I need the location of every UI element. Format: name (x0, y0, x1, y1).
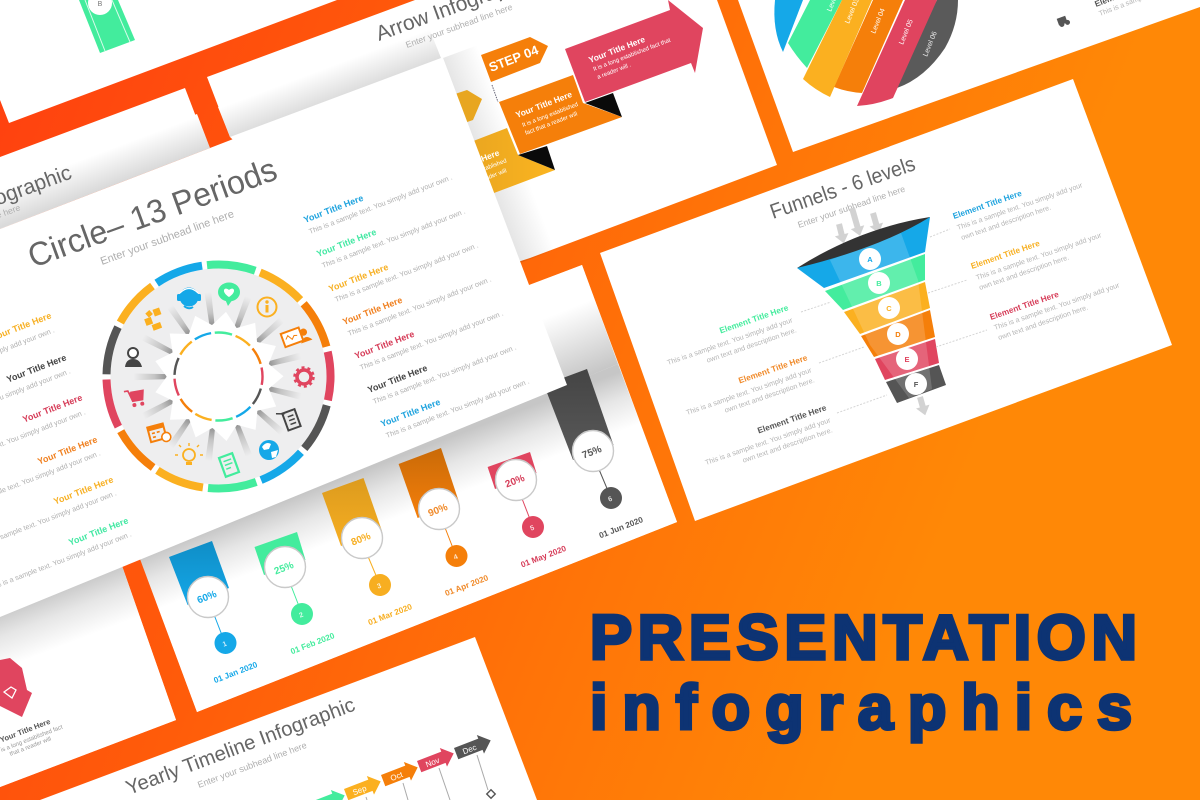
step 4: 90%: 01 Apr 2020 (444, 573, 490, 598)
element text: blue: Element Title Here (951, 188, 1023, 221)
dotted connector (492, 85, 498, 102)
arrow: Dec (453, 731, 494, 763)
right list: item 1: Your Title Here (302, 193, 365, 225)
subhead: Enter your subhead line here (99, 208, 236, 268)
panel: circle 13 periods slide (0, 58, 567, 617)
outer ring segments (60, 218, 377, 535)
red step arrow: It is a long established fact that (593, 38, 672, 73)
element text: orange: This is a sample text. You simply add your (685, 366, 813, 417)
inner ring segments (156, 314, 281, 439)
element text: orange: Element Title Here (737, 352, 809, 385)
step 1: 60%: 1 (222, 641, 228, 649)
step 3: 80% (322, 478, 414, 627)
step 04 tag (481, 37, 548, 82)
caption: Your Title Here (0, 717, 52, 744)
right list: item 6: Your Title Here (366, 363, 429, 395)
arrow: Oct: Oct (389, 770, 405, 783)
element text: dark: own text and description here. (742, 426, 834, 465)
funnel stack: C (886, 304, 892, 313)
element text: dark: Element Title Here (756, 402, 828, 435)
step 4: 90%: 4 (453, 554, 459, 562)
icon: info circle (258, 298, 276, 316)
step 3: 80%: 80% (350, 531, 373, 548)
headline: PRESENTATION infographics: infographics (590, 673, 1132, 743)
icon: document (276, 407, 301, 433)
left list: item 6: Your Title Here (67, 516, 130, 548)
right list: item 7: This is a sample text. You simply add your own . (384, 377, 531, 440)
subhead: Enter your subhead line here (404, 2, 514, 50)
left list: item 2: Your Title Here (5, 353, 68, 385)
headline: PRESENTATION infographics (590, 603, 1137, 743)
step 5: 20%: 20% (504, 473, 527, 490)
element text: green: Element Title Here (718, 302, 790, 335)
step 1: 60%: 01 Jan 2020 (213, 660, 259, 685)
arrow: Sep: Sep (351, 784, 368, 797)
heading: Yearly Timeline Infographic (123, 694, 358, 800)
element text: dark: This is a sample text. You simply add your (704, 416, 832, 467)
red arrow with diamond icon (0, 658, 32, 717)
element text: orange: own text and description here. (724, 376, 816, 415)
right list: item 4: This is a sample text. You simply add your own . (346, 275, 493, 338)
yellow step block (441, 128, 555, 194)
funnel circle B (868, 272, 890, 294)
subhead: Enter your subhead line here (796, 184, 907, 230)
right list: item 2: This is a sample text. You simply add your own . (320, 207, 467, 270)
green ribbon with letter B: B (98, 1, 103, 8)
step 4: 90%: 90% (427, 502, 450, 519)
panel: percentage timeline slide (100, 265, 677, 712)
step 2: 25%: 2 (298, 612, 305, 620)
step 5: 20%: 5 (529, 525, 536, 533)
right list: item 5: Your Title Here (353, 329, 416, 361)
icon: note with pen (219, 453, 239, 477)
panel: yearly timeline slide (40, 637, 537, 800)
red step arrow: a reader will . (597, 62, 632, 81)
funnel circle F (905, 373, 927, 395)
icon: dark gears (1057, 15, 1071, 28)
arrow: Dec: Dec (461, 743, 478, 756)
heading: Funnels - 6 levels (767, 152, 918, 224)
step 6: 75% (544, 369, 645, 540)
step 04 tag: STEP 04 (487, 42, 541, 75)
arrow: Nov: Nov (424, 756, 441, 769)
milestone diamond (487, 790, 495, 798)
left list: item 3: Your Title Here (21, 393, 84, 425)
headline: PRESENTATION infographics: PRESENTATION (590, 603, 1137, 673)
right list: item 1: This is a sample text. You simply add your own . (307, 173, 454, 236)
step 6: 75%: 6 (607, 496, 614, 504)
pie of levels (774, 0, 958, 106)
red step arrow (565, 0, 703, 102)
white starburst (152, 310, 284, 443)
left list: item 4: Your Title Here (36, 435, 99, 467)
element text: yellow: This is a sample text. You simply add your (975, 231, 1103, 282)
element text: green: own text and description here. (706, 326, 798, 365)
panel: arrow infographic slide (207, 0, 777, 300)
arrow: Nov (416, 744, 457, 776)
panel: infographic slide behind circle (0, 88, 210, 251)
orange step block: Your Title Here (514, 89, 574, 120)
right list: item 5: This is a sample text. You simply add your own . (358, 309, 505, 372)
left list: item 5: Your Title Here (52, 475, 115, 507)
element text: yellow: Element Title Here (969, 238, 1041, 271)
icon: person (125, 348, 142, 367)
funnel stack: E (904, 355, 910, 364)
panel: funnel slide (600, 79, 1172, 521)
element text: red: Element Title Here (988, 289, 1060, 322)
step 2: 25%: 01 Feb 2020 (289, 631, 336, 656)
funnel stack: A (867, 255, 873, 264)
icon: headset (177, 288, 201, 308)
funnel stack (797, 217, 946, 403)
yellow step block: fact that a reader will (454, 168, 508, 194)
yellow step block: Your Title Here (441, 147, 501, 178)
right list: item 2: Your Title Here (315, 227, 378, 259)
funnel circle E (896, 348, 918, 370)
icon: heart speech bubble (218, 282, 240, 306)
orange step block (499, 75, 622, 154)
element text: blue: This is a sample text. You simply add your (956, 181, 1084, 232)
icon: presentation board (281, 324, 312, 349)
step 6: 75%: 75% (581, 444, 604, 461)
icon: shopping cart (124, 388, 146, 408)
subhead: Enter your subhead line here (196, 740, 308, 790)
green ribbon with letter B (79, 0, 135, 53)
arrow: Oct (380, 758, 421, 790)
right list: item 7: Your Title Here (379, 397, 442, 429)
funnel circle C (878, 297, 900, 319)
icon: gear (294, 368, 314, 386)
panel: top-right levels slide (738, 0, 1200, 152)
element text: yellow: own text and description here. (978, 254, 1070, 292)
funnel circle A (859, 248, 881, 270)
arrow: Aug (307, 786, 348, 800)
right list: item 3: Your Title Here (327, 262, 390, 294)
input arrows (832, 206, 886, 245)
right list: item 4: Your Title Here (341, 295, 404, 327)
funnel stack: F (914, 380, 919, 389)
step 2: 25%: 25% (273, 560, 296, 577)
orange step block: It is a long established (522, 102, 579, 129)
step 5: 20%: 01 May 2020 (520, 544, 568, 569)
step 03 tag (440, 90, 482, 128)
panel: top-left slide (0, 0, 337, 123)
step 3: 80%: 01 Mar 2020 (367, 602, 414, 627)
right list: item 6: This is a sample text. You simply add your own . (371, 343, 518, 406)
pie of levels: Level 06 (922, 30, 939, 58)
circle diagram (60, 218, 377, 535)
element text: red: This is a sample text. You simply add your (993, 281, 1121, 332)
funnel stack: D (895, 330, 901, 339)
panel: lower-left slide (0, 560, 176, 787)
pie of levels: Level 04 (870, 7, 887, 35)
right list: item 3: This is a sample text. You simply add your own . (333, 241, 480, 304)
pie of levels: Level 05 (898, 18, 915, 46)
orange step block: fact that a reader will (525, 111, 578, 137)
icon: light bulb (175, 443, 203, 465)
heading: Circle– 13 Periods (23, 150, 282, 275)
step 3: 80%: 3 (376, 583, 383, 591)
step 4: 90% (399, 448, 490, 598)
step 2: 25% (254, 532, 336, 656)
wedge separators (128, 287, 307, 466)
yellow step block: It is a long established (450, 158, 508, 185)
element text: red: own text and description here. (997, 304, 1089, 342)
element text: blue: own text and description here. (960, 204, 1052, 242)
icon: calendar clock (147, 422, 172, 445)
step 1: 60%: 60% (196, 589, 219, 606)
step 6: 75%: 01 Jun 2020 (598, 515, 645, 540)
icon: boxes (142, 307, 166, 332)
caption: that a reader will (9, 736, 52, 758)
red step arrow: Your Title Here (587, 34, 647, 65)
funnel circle D (887, 323, 909, 345)
icon: globe (259, 440, 279, 460)
element text: green: This is a sample text. You simply add your (666, 316, 794, 367)
dotted leader lines (801, 229, 987, 413)
funnel stack: B (876, 279, 882, 288)
timeline stems (366, 755, 488, 800)
arrow: Sep (343, 772, 384, 800)
output arrow (913, 395, 932, 417)
step 5: 20% (488, 452, 568, 569)
step 1: 60% (169, 541, 259, 685)
